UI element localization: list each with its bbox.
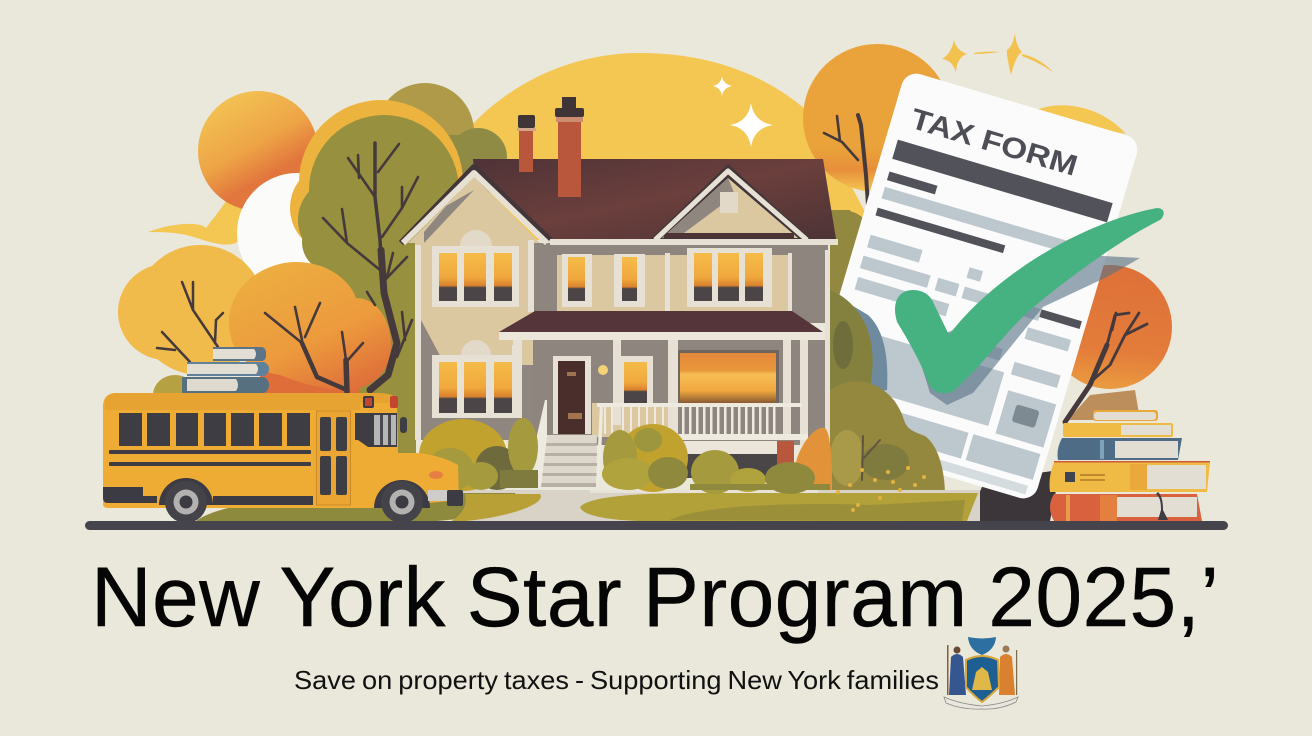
left figure	[947, 645, 966, 695]
stacked books on bus	[182, 347, 269, 393]
shield sun emblem	[972, 667, 992, 690]
bus body	[103, 393, 459, 508]
tan mound behind books	[1068, 390, 1140, 420]
bus door	[316, 411, 350, 505]
red book	[1050, 494, 1202, 521]
front wheel	[381, 481, 423, 523]
bus wheel arches	[159, 478, 430, 508]
back olive tree	[376, 83, 507, 195]
form shadow band on lower left	[845, 303, 887, 395]
porch side window	[621, 356, 653, 416]
front door	[553, 356, 591, 434]
tax form document	[799, 70, 1141, 502]
lower left window	[432, 340, 522, 418]
New York state seal	[944, 637, 1018, 709]
front steps	[537, 400, 603, 487]
tall chimney	[555, 97, 584, 197]
bus roof band	[105, 393, 397, 410]
seal ribbon	[944, 697, 1018, 709]
front garden bushes	[419, 418, 832, 494]
right figure	[999, 646, 1017, 695]
porch roof	[499, 311, 823, 332]
right tree branches	[1065, 313, 1147, 422]
porch railing	[597, 403, 808, 440]
orange tree	[229, 262, 391, 394]
olive bush at form edge	[830, 210, 880, 300]
yellow sparkles and arcs	[942, 33, 1053, 75]
porch fascia	[499, 332, 823, 340]
subtitle: Save on property taxes - Supporting New York families	[294, 665, 939, 695]
blue book	[1058, 438, 1182, 460]
upper middle windows	[562, 254, 645, 307]
sky sparkles	[713, 76, 773, 147]
bus headlight	[429, 471, 443, 479]
left sunset circle	[198, 91, 318, 211]
rear wheel	[165, 481, 207, 523]
left gable dark edge	[401, 167, 550, 243]
house	[401, 97, 838, 487]
main tree canopy	[290, 100, 463, 460]
bus mirror	[400, 417, 407, 433]
olive bush beside form	[830, 290, 873, 398]
right gable	[651, 164, 811, 240]
form sheet	[799, 70, 1141, 502]
left gable trim	[403, 173, 547, 243]
lower right bushes in front of form	[830, 381, 945, 495]
porch columns	[513, 340, 808, 445]
form lines	[812, 140, 1117, 496]
eagle crest	[968, 637, 996, 655]
lawn and walkway	[195, 490, 980, 522]
dark hill under form	[967, 470, 1060, 521]
right shrubs	[690, 428, 832, 494]
top right yellow dome	[1037, 105, 1126, 134]
green checkmark	[895, 208, 1164, 393]
porch tan base	[592, 403, 672, 437]
bus side windows	[119, 413, 310, 446]
central shield	[966, 656, 999, 702]
right olive tree behind house	[830, 210, 862, 300]
left shrubs	[419, 418, 538, 492]
upper left window	[432, 230, 519, 307]
checkmark shadow	[915, 255, 1140, 405]
wall trim boards	[415, 240, 830, 440]
small bare tree top right	[824, 115, 868, 205]
left chimney	[517, 115, 536, 172]
white circle	[237, 173, 357, 293]
eaves	[550, 239, 838, 245]
ground line	[85, 521, 1228, 530]
main title: New York Star Program 2025,’	[91, 550, 1219, 644]
branches: orange tree	[265, 303, 363, 392]
school bus	[103, 393, 463, 523]
large porch window	[677, 350, 779, 406]
branches: main tree	[323, 143, 418, 390]
yellow tree at left	[118, 245, 267, 375]
bus windshield	[355, 413, 397, 447]
bus warning lights	[363, 396, 398, 408]
bookmark	[1156, 492, 1168, 520]
form heading: TAX FORM	[907, 103, 1081, 183]
central upper wall	[533, 243, 828, 323]
top book	[1093, 410, 1158, 421]
fallen leaves	[836, 466, 926, 512]
bus stripes	[109, 450, 311, 466]
bus lower trim	[103, 487, 313, 505]
porch lamp	[598, 365, 608, 375]
bush twig	[862, 436, 880, 480]
background sun dome	[440, 53, 880, 240]
bus bumper	[428, 490, 463, 506]
porch foundation	[670, 441, 794, 478]
yellow book	[1063, 423, 1173, 437]
center shrubs	[602, 424, 688, 492]
branches: yellow tree	[157, 282, 223, 362]
top right orange circle	[803, 44, 951, 192]
books stack on right	[1050, 410, 1210, 521]
large yellow book	[1050, 461, 1210, 492]
small olive bush behind books	[153, 375, 197, 415]
porch lower wall	[533, 340, 825, 445]
left wing wall	[408, 177, 540, 440]
left yellow wave	[148, 201, 262, 245]
upper main roof	[473, 159, 836, 239]
upper right window	[687, 248, 772, 307]
right orange tree	[1048, 265, 1172, 389]
